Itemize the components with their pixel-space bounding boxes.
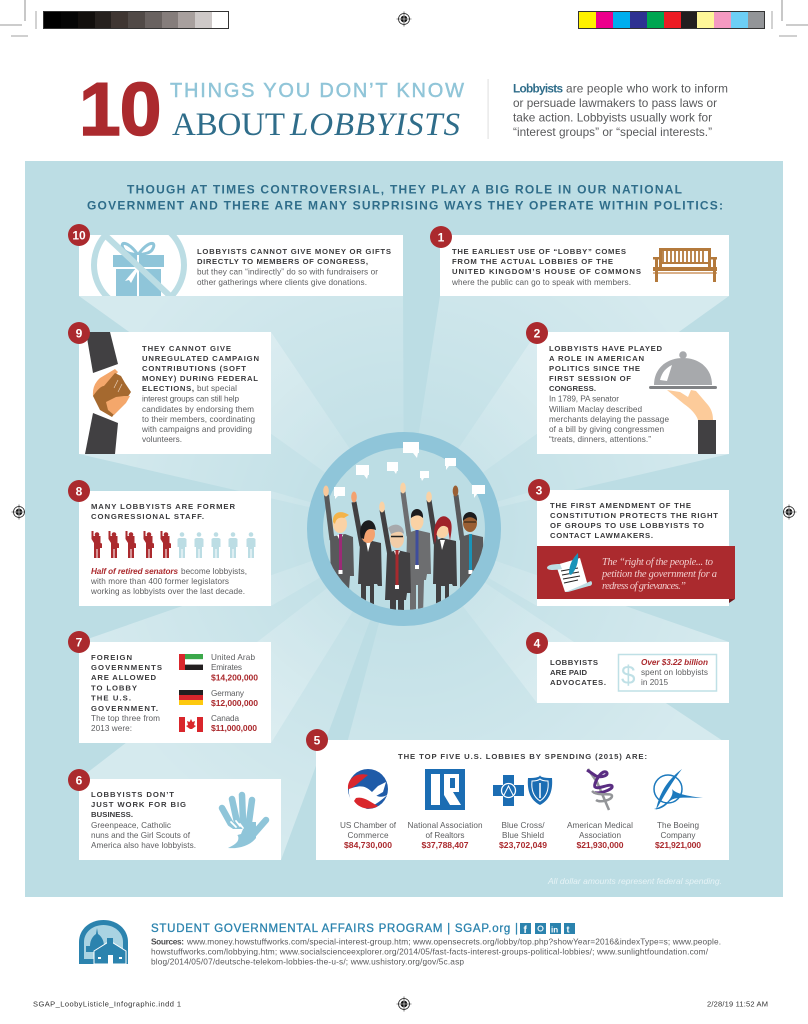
card 6 text: Greenpeace, Catholic bbox=[91, 821, 171, 830]
quote banner bbox=[537, 546, 735, 603]
card 6 text: BUSINESS. bbox=[91, 810, 133, 819]
card 4 text: LOBBYISTS bbox=[550, 658, 598, 667]
card 8 body: Half of retired senators bbox=[91, 567, 178, 576]
number badges: 5 bbox=[314, 734, 321, 748]
lobby names and spending: National Association bbox=[408, 821, 483, 830]
lobby names and spending: of Realtors bbox=[426, 831, 464, 840]
panel heading: THOUGH AT TIMES CONTROVERSIAL, THEY PLAY A BIG ROLE IN OUR NATIONAL bbox=[127, 182, 682, 196]
card 1 text bbox=[451, 247, 641, 287]
social media icons: t bbox=[566, 924, 570, 934]
sources bbox=[151, 936, 721, 966]
card 4 text: ADVOCATES. bbox=[550, 678, 606, 687]
number badges: 2 bbox=[534, 326, 541, 340]
title bbox=[79, 67, 464, 151]
group of people bbox=[323, 482, 484, 618]
logo: National Association of Realtors bbox=[425, 769, 465, 810]
card 7 text: GOVERNMENT. bbox=[91, 704, 158, 713]
flag: UAE bbox=[179, 654, 203, 670]
country spending list: $14,200,000 bbox=[211, 672, 258, 682]
print slug: 2/28/19 11:52 AM bbox=[707, 1000, 768, 1008]
icon: adult and child hands bbox=[222, 795, 266, 848]
card 9 text: candidates by endorsing them bbox=[142, 405, 254, 414]
card 6 text: LOBBYISTS DON’T bbox=[91, 790, 174, 799]
card 2 text: of a bill by giving congressmen bbox=[549, 425, 664, 434]
title: THINGS YOU DON’T KNOW bbox=[170, 80, 464, 102]
logo: Blue Cross Blue Shield bbox=[493, 775, 552, 806]
card 10 text: LOBBYISTS CANNOT GIVE MONEY OR GIFTS bbox=[197, 247, 391, 256]
card 10 text: other gatherings where clients give donations. bbox=[197, 278, 367, 287]
card 7 text: ARE ALLOWED bbox=[91, 673, 156, 682]
card 3: first amendment bbox=[537, 490, 735, 606]
callout: spending: Over $3.22 billion bbox=[641, 658, 708, 667]
card 6 text: nuns and the Girl Scouts of bbox=[91, 831, 191, 840]
card 6 text: JUST WORK FOR BIG bbox=[91, 800, 186, 809]
flag: Canada bbox=[179, 717, 203, 732]
card 1 text: FROM THE ACTUAL LOBBIES OF THE bbox=[452, 257, 613, 266]
card 9 text: but special bbox=[197, 384, 237, 393]
pictogram: five of ten senators bbox=[92, 531, 256, 558]
main panel background bbox=[25, 161, 783, 897]
card 9 text: ELECTIONS, bbox=[142, 384, 194, 393]
card 1 text: THE EARLIEST USE OF “LOBBY” COMES bbox=[452, 247, 626, 256]
lobby names and spending: Commerce bbox=[348, 831, 389, 840]
country spending list: $12,000,000 bbox=[211, 698, 258, 708]
card 10 text: but they can “indirectly” do so with fundraisers or bbox=[197, 268, 378, 276]
panel heading bbox=[87, 182, 723, 212]
card 2 text: POLITICS SINCE THE bbox=[549, 364, 640, 373]
country spending list: Germany bbox=[211, 689, 245, 698]
card 3 text: THE FIRST AMENDMENT OF THE bbox=[550, 501, 691, 510]
person 5 bbox=[426, 492, 457, 606]
card 4: paid advocates bbox=[537, 642, 729, 703]
card 2 text: William Maclay described bbox=[549, 405, 642, 414]
card 7 text: TO LOBBY bbox=[91, 684, 137, 692]
card 9 text: to their members, coordinating bbox=[142, 415, 255, 424]
card 8 body: working as lobbyists over the last decade. bbox=[90, 587, 245, 596]
footer logo: SGAP capitol and schoolhouse bbox=[79, 920, 128, 964]
card 4 text: ARE PAID bbox=[550, 668, 587, 677]
card 9 text: volunteers. bbox=[142, 435, 182, 444]
lobby names and spending: Blue Shield bbox=[502, 831, 544, 840]
card 5 heading: THE TOP FIVE U.S. LOBBIES BY SPENDING (2015) ARE: bbox=[398, 752, 647, 761]
number badges: 1 bbox=[438, 230, 445, 244]
intro text: Lobbyists bbox=[513, 82, 563, 96]
person 4 bbox=[400, 482, 431, 616]
title: 10 bbox=[79, 67, 160, 151]
icon: serving cloche on hand bbox=[649, 351, 717, 454]
lobby names and spending: $37,788,407 bbox=[422, 840, 469, 850]
intro text: take action. Lobbyists usually work for bbox=[513, 110, 712, 124]
card 2 text: A ROLE IN AMERICAN bbox=[549, 354, 644, 363]
callout: spending: spent on lobbyists bbox=[641, 668, 708, 677]
card 1 text: UNITED KINGDOM’S HOUSE OF COMMONS bbox=[452, 267, 641, 276]
print slug: SGAP_LoobyListicle_Infographic.indd 1 bbox=[33, 1000, 181, 1008]
card 1 text: where the public can go to speak with members. bbox=[451, 278, 631, 287]
number badges: 10 bbox=[72, 228, 86, 242]
print slug bbox=[33, 1000, 768, 1008]
number badges: 7 bbox=[76, 636, 83, 650]
card 9: soft money bbox=[79, 332, 271, 454]
icon: scroll and quill bbox=[547, 553, 592, 592]
card 3 text: CONTACT LAWMAKERS. bbox=[550, 531, 653, 540]
intro text bbox=[513, 82, 728, 139]
card 8: former staff bbox=[79, 491, 271, 606]
card 6 text bbox=[91, 790, 196, 850]
logo: American Medical Association bbox=[587, 769, 612, 810]
card 7 text: 2013 were: bbox=[91, 724, 132, 733]
card 10 text bbox=[197, 247, 391, 287]
lobby names and spending: $21,930,000 bbox=[576, 840, 624, 850]
card 6 text: America also have lobbyists. bbox=[91, 841, 196, 850]
card 2 text: CONGRESS. bbox=[549, 384, 596, 393]
person 1 bbox=[323, 486, 354, 590]
footnote: All dollar amounts represent federal spending. bbox=[547, 876, 722, 886]
country spending list: $11,000,000 bbox=[211, 723, 257, 733]
title: ABOUT bbox=[172, 107, 285, 143]
country spending list: Canada bbox=[211, 714, 239, 723]
lobby names and spending: The Boeing bbox=[657, 821, 699, 830]
person 3 bbox=[379, 502, 411, 618]
lobby names and spending: American Medical bbox=[567, 821, 633, 830]
card 7 text: FOREIGN bbox=[91, 653, 132, 662]
card 10 text: DIRECTLY TO MEMBERS OF CONGRESS, bbox=[197, 257, 368, 266]
sources: www.money.howstuffworks.com/special-interest-group.htm; www.opensecrets.org/lobby/top.php?showYear=2016&indexType=s; www.people. bbox=[186, 936, 721, 946]
card 7 text: The top three from bbox=[91, 714, 160, 723]
central illustration: lobbyists with raised hands bbox=[315, 440, 493, 618]
radiating light rays bbox=[79, 296, 729, 860]
number badges: 8 bbox=[76, 484, 83, 498]
card 6: not just big business bbox=[79, 779, 281, 860]
lobby names and spending: $84,730,000 bbox=[344, 840, 392, 850]
intro text: are people who work to inform bbox=[566, 82, 728, 96]
panel heading: GOVERNMENT AND THERE ARE MANY SURPRISING WAYS THEY OPERATE WITHIN POLITICS: bbox=[87, 198, 723, 212]
flag: Germany bbox=[179, 690, 203, 705]
card 3 text: OF GROUPS TO USE LOBBYISTS TO bbox=[550, 521, 704, 530]
icon: handshake bbox=[85, 332, 131, 454]
lobby names and spending: US Chamber of bbox=[340, 821, 397, 830]
speech bubbles bbox=[334, 442, 485, 499]
card 8 text: CONGRESSIONAL STAFF. bbox=[91, 512, 204, 521]
social media icons bbox=[520, 923, 575, 936]
card 8 body: with more than 400 former legislators bbox=[90, 577, 229, 586]
social media icons: f bbox=[524, 925, 528, 936]
footer program title: STUDENT GOVERNMENTAL AFFAIRS PROGRAM | SGAP.org | bbox=[151, 923, 518, 935]
number badges: 6 bbox=[76, 774, 83, 788]
card 9 text: MONEY) DURING FEDERAL bbox=[142, 374, 258, 383]
card 7 text: GOVERNMENTS bbox=[91, 663, 162, 672]
country spending list: Emirates bbox=[211, 663, 242, 672]
card 1: origin of lobby bbox=[440, 235, 729, 296]
card 7: foreign governments bbox=[79, 642, 271, 743]
quote text bbox=[601, 557, 717, 592]
card 2 text: “treats, dinners, attentions.” bbox=[549, 435, 651, 444]
number badges: 3 bbox=[536, 484, 543, 498]
icon: bench bbox=[653, 248, 717, 282]
logo: Boeing bbox=[654, 769, 703, 810]
sources: howstuffworks.com/lobbying.htm; www.socialscienceexplorer.org/2014/05/fast-facts-interest-groups-political-lobbies/; www.sunlightfoundation.com/ bbox=[151, 946, 709, 956]
card 7 text bbox=[91, 653, 162, 733]
card 3 text bbox=[550, 501, 718, 540]
callout: spending bbox=[618, 654, 716, 691]
title: LOBBYISTS bbox=[289, 107, 460, 143]
card 9 text: UNREGULATED CAMPAIGN bbox=[142, 354, 259, 363]
quote text: The “right of the people... to bbox=[602, 557, 713, 568]
lobby names and spending bbox=[340, 821, 701, 850]
number badges: 4 bbox=[534, 636, 541, 650]
intro text: or persuade lawmakers to pass laws or bbox=[513, 96, 717, 110]
card 2 text bbox=[549, 344, 669, 444]
country spending list: United Arab bbox=[211, 653, 255, 662]
country spending list bbox=[211, 653, 258, 733]
quote text: redress of grievances.” bbox=[602, 581, 686, 592]
lobby names and spending: $21,921,000 bbox=[655, 840, 701, 850]
callout: spending: in 2015 bbox=[641, 678, 668, 687]
lobby names and spending: Association bbox=[579, 831, 621, 840]
lobby names and spending: Company bbox=[660, 831, 696, 840]
card 4 text bbox=[550, 658, 606, 687]
card 2 text: In 1789, PA senator bbox=[549, 394, 619, 404]
title divider bbox=[488, 79, 489, 139]
quote text: petition the government for a bbox=[601, 569, 717, 580]
card 10: gifts bbox=[79, 235, 403, 296]
card 9 text: CONTRIBUTIONS (SOFT bbox=[142, 364, 246, 373]
number badges: 9 bbox=[76, 326, 83, 340]
callout: spending: $ bbox=[621, 660, 636, 690]
logo: US Chamber of Commerce bbox=[348, 769, 392, 809]
sources: Sources: bbox=[151, 936, 184, 946]
card 8 text: MANY LOBBYISTS ARE FORMER bbox=[91, 502, 235, 511]
card 9 text: with campaigns and providing bbox=[141, 425, 252, 434]
card 2 text: FIRST SESSION OF bbox=[549, 374, 631, 383]
card 2 text: merchants delaying the passage bbox=[549, 415, 669, 424]
card 7 text: THE U.S. bbox=[91, 694, 131, 702]
card 9 text: THEY CANNOT GIVE bbox=[142, 344, 231, 353]
person 6 bbox=[453, 486, 484, 590]
card 8 body bbox=[90, 567, 247, 596]
icon: crossed-out gift bbox=[91, 235, 187, 296]
social media icons: in bbox=[551, 926, 558, 934]
card 8 body: become lobbyists, bbox=[181, 567, 247, 576]
sources: blog/2014/05/07/deutsche-telekom-lobbies-the-u-s/; www.ushistory.org/gov/5c.asp bbox=[151, 956, 464, 966]
card 9 text: interest groups can still help bbox=[142, 394, 239, 404]
person 2 bbox=[351, 492, 382, 606]
card 9 text bbox=[141, 344, 259, 444]
intro text: “interest groups” or “special interests.” bbox=[513, 125, 712, 139]
number badges bbox=[68, 224, 550, 791]
card 8 text bbox=[91, 502, 235, 521]
card 5: top five lobbies bbox=[316, 740, 729, 860]
card 3 text: CONSTITUTION PROTECTS THE RIGHT bbox=[550, 511, 718, 520]
card 2 text: LOBBYISTS HAVE PLAYED bbox=[549, 344, 662, 353]
card 2: first session of congress bbox=[537, 332, 729, 454]
lobby names and spending: Blue Cross/ bbox=[502, 821, 545, 830]
lobby names and spending: $23,702,049 bbox=[499, 840, 547, 850]
